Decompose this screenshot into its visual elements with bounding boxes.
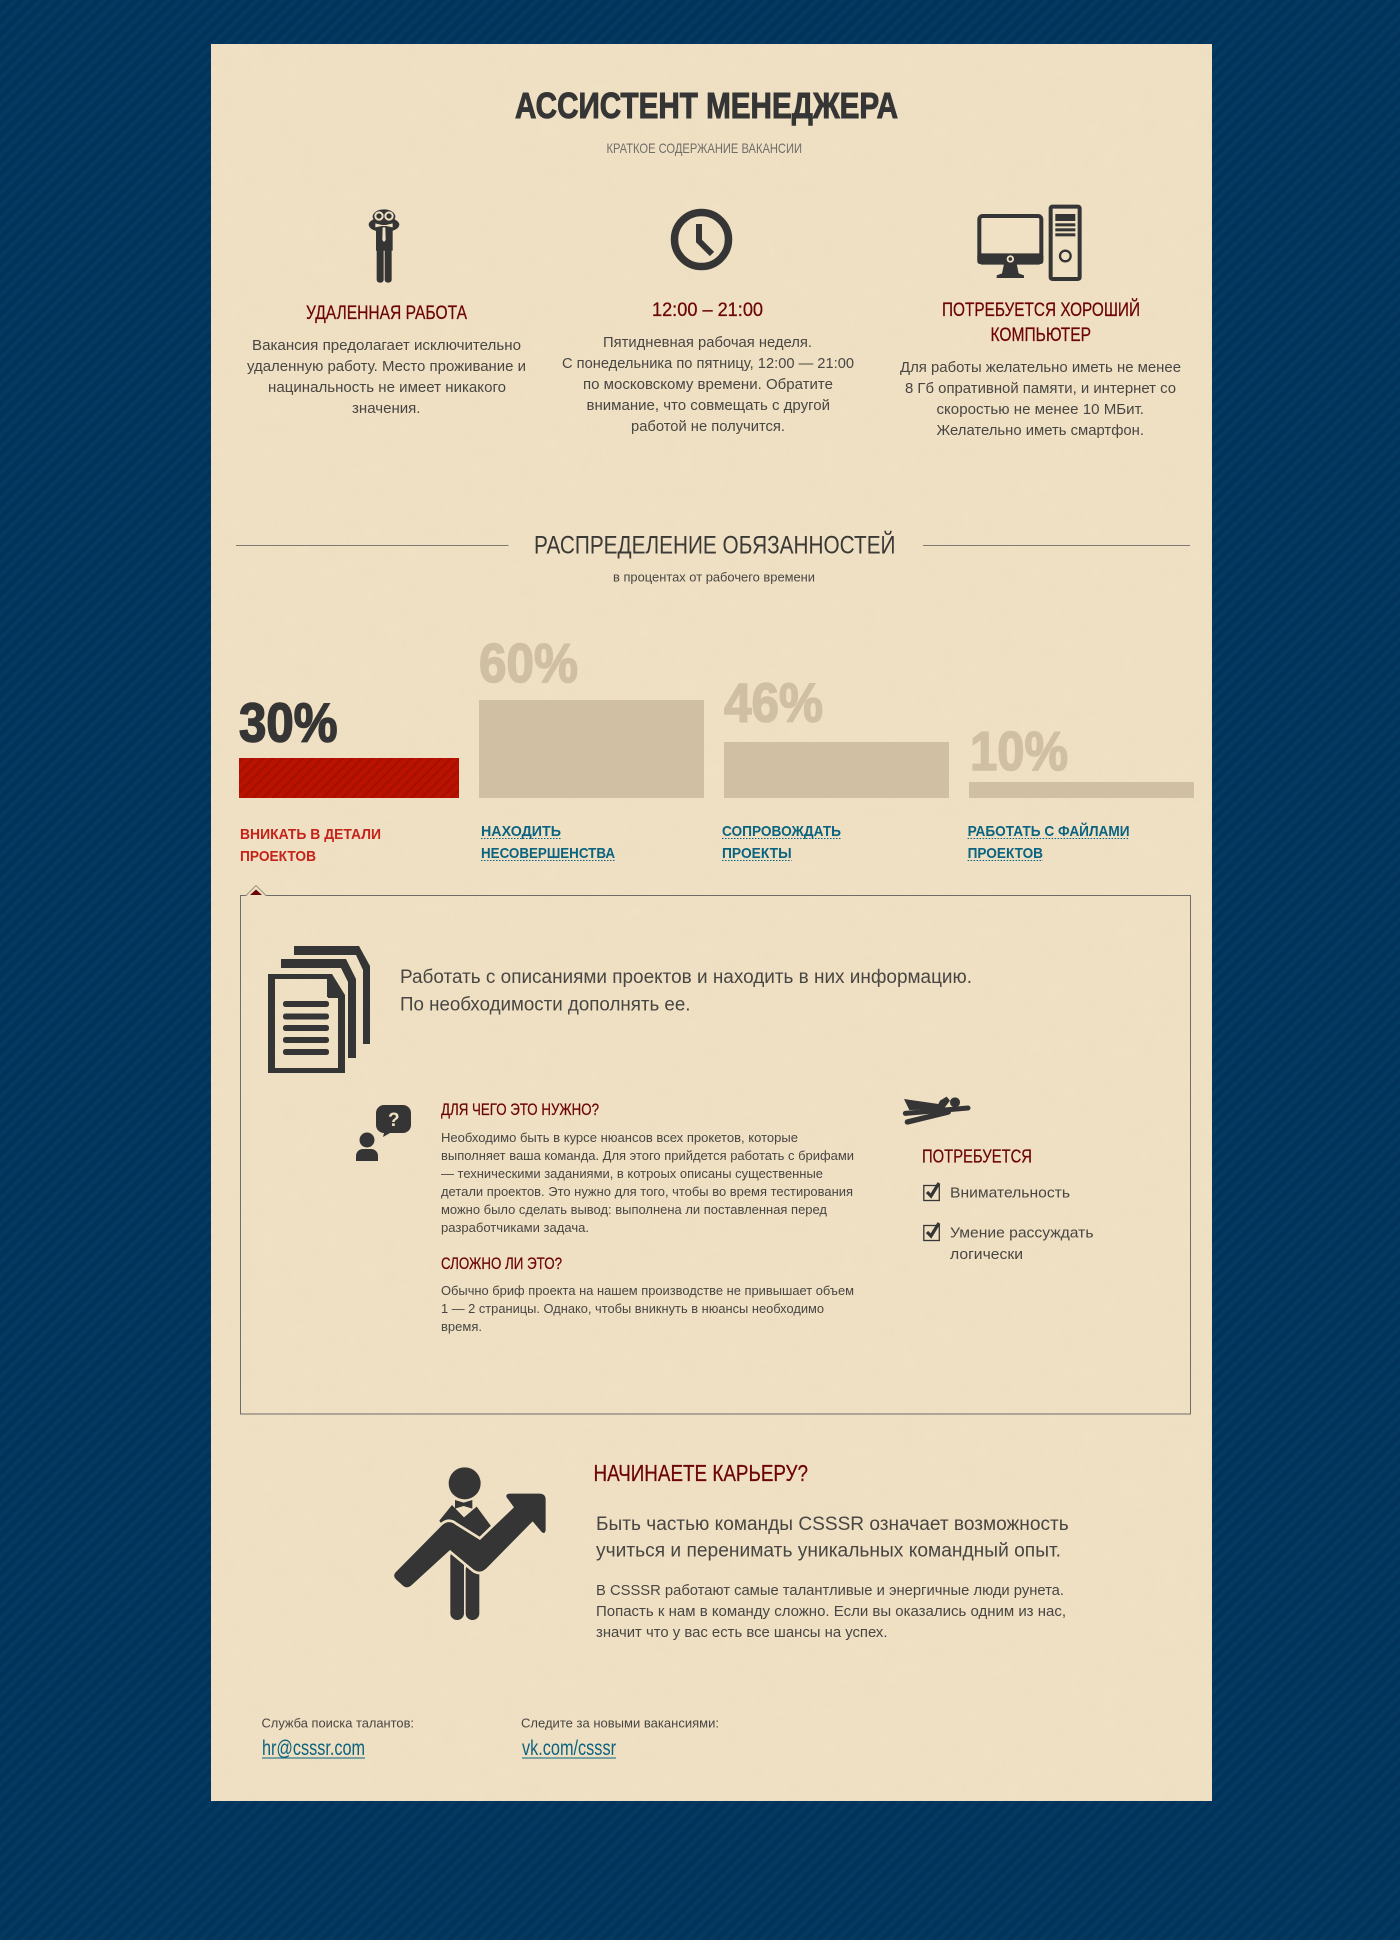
text: remote work description: нацинальность не имеет никакого [268, 379, 506, 396]
text: why it is needed: разработчиками задача. [441, 1221, 589, 1235]
text: career lead: учиться и перенимать уникальных командный опыт. [596, 1541, 1061, 1562]
text: hours description [562, 334, 854, 435]
bar chart: duties share [239, 632, 1194, 798]
bar: 46%: 46% [724, 672, 823, 734]
text: hours description: Пятидневная рабочая неделя. [603, 334, 812, 351]
text: hours description: внимание, что совмещать с другой [586, 397, 830, 414]
text: why it is needed: Необходимо быть в курсе нюансов всех прокетов, которые [441, 1131, 798, 1145]
text: why it is needed: — техническими заданиями, в котроых описаны существенные [441, 1167, 823, 1181]
label: work with project files: РАБОТАТЬ С ФАЙЛАМИ [968, 822, 1130, 840]
text: why it is needed [441, 1131, 854, 1235]
checklist item: logical thinking: Умение рассуждать [950, 1225, 1094, 1242]
text: career body [596, 1582, 1066, 1641]
contact: new vacancies: Следите за новыми вакансиями: [521, 1717, 719, 1731]
bar: 46% [724, 672, 949, 798]
text: is it hard: время. [441, 1320, 482, 1334]
pointer triangle [246, 886, 266, 896]
text: hours description: работой не получится. [631, 418, 785, 435]
title: АССИСТЕНТ МЕНЕДЖЕРА [515, 85, 898, 126]
icon: man with binoculars [369, 209, 399, 283]
text: remote work description: значения. [352, 400, 420, 417]
text: duty summary: Работать с описаниями проектов и находить в них информацию. [400, 967, 972, 988]
icon: person with question bubble: ? [388, 1110, 400, 1131]
text: is it hard [441, 1284, 854, 1334]
label: work with project files: ПРОЕКТОВ [968, 845, 1043, 862]
text: computer description [900, 359, 1181, 439]
icon: clock [674, 212, 728, 266]
label: work with project files [968, 822, 1130, 862]
contact: new vacancies: vk.com/csssr [522, 1737, 616, 1760]
contact: talent search [262, 1717, 414, 1760]
heading: remote work: УДАЛЕННАЯ РАБОТА [306, 303, 467, 324]
column: computer [900, 207, 1181, 439]
text: remote work description: Вакансия предолагает исключительно [252, 337, 521, 354]
label: find flaws: НЕСОВЕРШЕНСТВА [481, 845, 615, 862]
heading: why it is needed: ДЛЯ ЧЕГО ЭТО НУЖНО? [441, 1100, 599, 1119]
text: duty summary: По необходимости дополнять ее. [400, 995, 690, 1016]
text: why it is needed: детали проектов. Это нужно для того, чтобы во время тестирования [441, 1185, 853, 1199]
heading: hours: 12:00 – 21:00 [652, 300, 763, 321]
label: support projects: СОПРОВОЖДАТЬ [722, 823, 841, 840]
label: find flaws: НАХОДИТЬ [481, 823, 561, 840]
checklist item: logical thinking: логически [950, 1246, 1023, 1263]
section heading: duties [236, 530, 1190, 585]
checklist item: attentiveness: Внимательность [950, 1185, 1070, 1202]
icon: flying man [904, 1097, 968, 1122]
label: support projects: ПРОЕКТЫ [722, 845, 792, 862]
text: duty summary [400, 967, 972, 1016]
heading: requirements: ПОТРЕБУЕТСЯ [922, 1147, 1032, 1167]
text: computer description: Желательно иметь смартфон. [936, 422, 1144, 439]
text: why it is needed: можно было сделать вывод: выполнена ли поставленная перед [441, 1203, 828, 1217]
label: dig into project details (active) [240, 826, 381, 865]
column: remote work [247, 209, 526, 417]
contact: new vacancies [521, 1717, 719, 1760]
text: is it hard: Обычно бриф проекта на нашем производстве не привышает объем [441, 1284, 854, 1298]
heading: is it hard: СЛОЖНО ЛИ ЭТО? [441, 1254, 562, 1273]
text: why it is needed: выполняет ваша команда. Для этого прийдется работать с брифами [441, 1149, 854, 1163]
bar: 60% [479, 632, 704, 798]
label: dig into project details (active): ПРОЕКТОВ [240, 848, 316, 865]
contact: talent search: hr@csssr.com [262, 1737, 365, 1760]
subtitle: КРАТКОЕ СОДЕРЖАНИЕ ВАКАНСИИ [606, 140, 802, 156]
icon: stack of documents [268, 946, 370, 1073]
bar: 30% active [239, 692, 459, 798]
bar: 60%: 60% [479, 632, 578, 694]
panel: vacancy sheet [211, 44, 1212, 1801]
checklist item: logical thinking [924, 1223, 1094, 1263]
column: working hours [562, 212, 854, 435]
text: hours description: С понедельника по пятницу, 12:00 — 21:00 [562, 355, 854, 372]
heading: starting a career: НАЧИНАЕТЕ КАРЬЕРУ? [594, 1460, 808, 1486]
label: dig into project details (active): ВНИКАТЬ В ДЕТАЛИ [240, 826, 381, 843]
bar: 10%: 10% [970, 720, 1068, 782]
text: computer description: Для работы желательно иметь не менее [900, 359, 1181, 376]
bar: 30% active: 30% [239, 692, 338, 754]
text: career body: значит что у вас есть все шансы на успех. [596, 1624, 888, 1641]
icon: desktop computer [977, 207, 1080, 279]
heading: computer: ПОТРЕБУЕТСЯ ХОРОШИЙ [942, 299, 1140, 321]
text: computer description: скоростью не менее 10 МБит. [936, 401, 1144, 418]
icon: person with question bubble [356, 1105, 411, 1161]
bar: 10% [969, 720, 1194, 798]
text: career body: В CSSSR работают самые талантливые и энергичные люди рунета. [596, 1582, 1064, 1599]
contact: talent search: Служба поиска талантов: [262, 1717, 414, 1731]
text: career lead [596, 1514, 1069, 1562]
heading: computer [942, 299, 1140, 346]
section heading: duties: в процентах от рабочего времени [613, 570, 815, 585]
text: remote work description: удаленную работу. Место проживание и [247, 358, 526, 375]
label: support projects [722, 823, 841, 862]
section heading: duties: РАСПРЕДЕЛЕНИЕ ОБЯЗАННОСТЕЙ [534, 530, 896, 560]
text: remote work description [247, 337, 526, 417]
icon: man with rising arrow [394, 1467, 546, 1620]
text: computer description: 8 Гб опративной памяти, и интернет со [905, 380, 1176, 397]
text: career lead: Быть частью команды CSSSR означает возможность [596, 1514, 1069, 1535]
heading: computer: КОМПЬЮТЕР [990, 325, 1091, 346]
label: find flaws [481, 823, 615, 862]
panel: duty detail box [240, 886, 1190, 1414]
text: career body: Попасть к нам в команду сложно. Если вы оказались одним из нас, [596, 1603, 1066, 1620]
text: hours description: по московскому времени. Обратите [583, 376, 833, 393]
text: is it hard: 1 — 2 страницы. Однако, чтобы вникнуть в нюансы необходимо [441, 1302, 824, 1316]
